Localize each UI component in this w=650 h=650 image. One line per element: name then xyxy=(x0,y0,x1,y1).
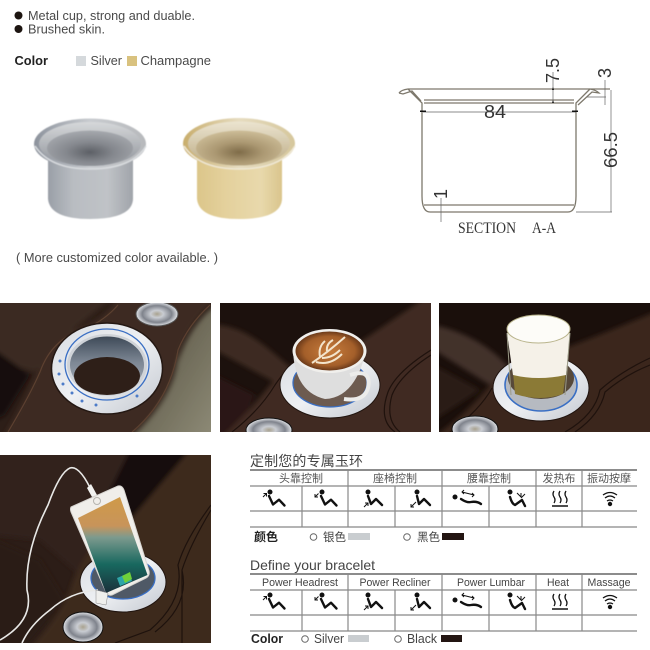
section drawing: SECTION xyxy=(458,220,516,237)
cup profile xyxy=(399,89,610,212)
photo: phone charging xyxy=(0,450,216,648)
silver cup xyxy=(34,118,146,219)
icon: heat xyxy=(552,491,568,506)
chinese color options: 颜色 xyxy=(254,529,278,544)
section drawing xyxy=(399,58,621,237)
chinese bracelet heading: 定制您的专属玉环 xyxy=(250,453,363,469)
color legend: Silver xyxy=(90,53,123,68)
section drawing: 1 xyxy=(431,189,451,199)
dimension lines xyxy=(423,72,612,222)
icon: massage wave xyxy=(603,492,617,506)
chinese function table: 座椅控制 xyxy=(373,471,417,485)
english color options xyxy=(251,631,462,646)
english function table: Power Lumbar xyxy=(457,577,525,589)
icon: recliner in xyxy=(411,490,430,507)
feature list: Metal cup, strong and duable. xyxy=(28,9,195,23)
english function table: Heat xyxy=(547,577,570,589)
english function table: Massage xyxy=(588,577,630,589)
icon: headrest down xyxy=(315,490,336,506)
photo: empty cup holder xyxy=(0,298,216,437)
english color options: Color xyxy=(251,631,283,646)
champagne cup xyxy=(183,118,295,219)
color legend xyxy=(14,53,211,68)
dimension labels: 84 xyxy=(484,102,506,122)
section drawing: A-A xyxy=(532,220,556,237)
chinese function table: 腰靠控制 xyxy=(467,471,511,485)
english function table: Power Recliner xyxy=(360,577,431,589)
feature list xyxy=(14,9,195,36)
chinese function table: 振动按摩 xyxy=(587,471,631,485)
icon: headrest down xyxy=(315,592,336,608)
section drawing: 66.5 xyxy=(601,132,621,168)
chinese color options xyxy=(254,529,464,544)
icon: lumbar xyxy=(452,490,481,504)
icon: headrest up xyxy=(263,490,284,506)
chinese function table xyxy=(250,470,637,527)
icon: recliner in xyxy=(411,592,430,610)
note: customized color: ( More customized color available. ) xyxy=(16,250,218,265)
color legend: Color xyxy=(14,53,48,68)
chinese color options: 银色 xyxy=(323,530,346,544)
icon: massage wave xyxy=(603,596,617,609)
icon: lumbar massage xyxy=(508,490,525,506)
feature list: Brushed skin. xyxy=(28,22,105,36)
icon: recliner out xyxy=(364,490,382,507)
icon: lumbar xyxy=(452,593,481,607)
icon: recliner out xyxy=(364,592,382,610)
photo: coffee in holder xyxy=(220,303,431,432)
section drawing: 7.5 xyxy=(543,58,563,83)
section drawing: 3 xyxy=(595,68,615,78)
icon: heat xyxy=(552,594,568,609)
chinese function table: 头靠控制 xyxy=(279,471,323,485)
chinese function table: 发热布 xyxy=(542,471,576,485)
english color options: Black xyxy=(407,632,438,646)
photo: beer glass in holder xyxy=(434,303,650,442)
color legend: Champagne xyxy=(140,53,211,68)
english function table: Power Headrest xyxy=(262,577,339,589)
icon: headrest up xyxy=(263,592,284,608)
english bracelet heading: Define your bracelet xyxy=(250,557,375,573)
icon: lumbar massage xyxy=(508,592,525,609)
english color options: Silver xyxy=(314,632,344,646)
chinese color options: 黑色 xyxy=(417,530,440,544)
english function table xyxy=(250,574,637,631)
